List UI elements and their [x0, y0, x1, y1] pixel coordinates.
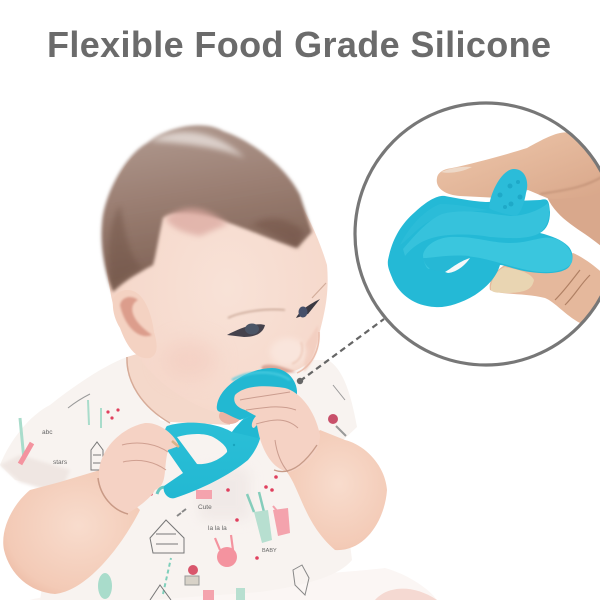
right cheek: [304, 325, 318, 372]
dress: stars: [53, 459, 68, 466]
dress: abc: [42, 429, 53, 436]
nose: [270, 338, 306, 366]
neck: [127, 350, 240, 425]
finger behind teether: [219, 408, 241, 424]
dress: la la la: [208, 525, 227, 532]
left hand: [99, 423, 179, 514]
dress print: [20, 385, 346, 600]
left arm: [3, 470, 140, 594]
right arm: [280, 430, 387, 550]
mouth shadow: [260, 365, 296, 376]
right hand: [234, 386, 320, 472]
baby illustration: [0, 125, 437, 600]
head: [105, 135, 328, 413]
dress: BABY: [262, 548, 277, 554]
title: Flexible Food Grade Silicone: [47, 24, 551, 65]
skirt bottom: [30, 568, 437, 600]
dress: [0, 357, 357, 600]
dress: Cute: [198, 504, 212, 511]
ear: [113, 290, 157, 358]
nub with bumps: [489, 169, 527, 216]
dashed leader line: [297, 319, 384, 384]
teether: [164, 368, 297, 498]
hand holding toy: [437, 132, 600, 330]
hair: [101, 125, 312, 292]
magnified circle inset: [355, 103, 600, 365]
circle border: [355, 103, 600, 365]
cheek blush: [162, 340, 218, 380]
silicone toy strands: [388, 169, 572, 307]
eyes and brow: [227, 283, 326, 337]
